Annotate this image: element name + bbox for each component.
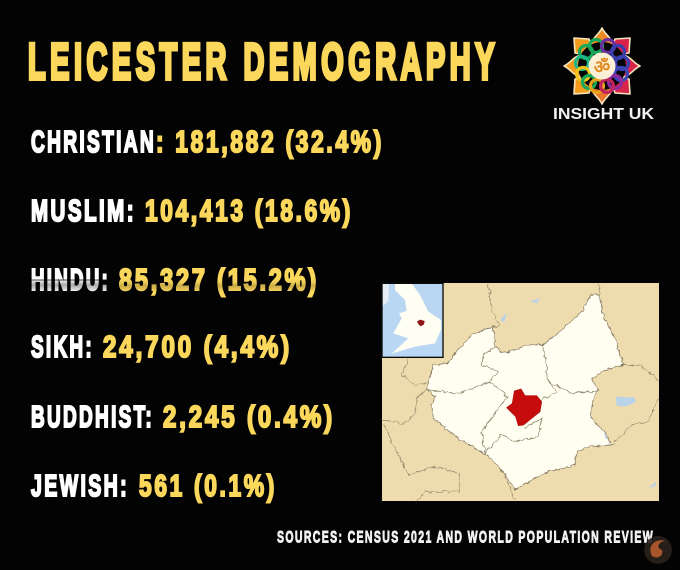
row: Buddhist [31, 399, 335, 434]
row: Sikh [31, 329, 292, 364]
row: Jewish: JEWISH: [31, 468, 129, 503]
row: Buddhist: BUDDHIST: [31, 399, 154, 434]
icon: mandala: ॐ [594, 57, 610, 77]
row: Jewish: 561 (0.1%) [139, 468, 277, 503]
row: Jewish [31, 468, 277, 503]
logo wordmark: INSIGHT UK [553, 106, 655, 123]
row: Sikh: SIKH: [31, 329, 94, 364]
district borders [427, 345, 598, 453]
Leicester city [507, 389, 542, 426]
water bodies [616, 397, 636, 407]
county outline [427, 293, 623, 490]
row: Muslim: 104,413 (18.6%) [145, 193, 353, 228]
row: Christian [31, 124, 384, 159]
row: Hindu: 85,327 (15.2%) [119, 262, 319, 297]
row: Christian: : 181,882 (32.4%) [156, 124, 384, 159]
inset map: England and Wales [382, 283, 443, 357]
watermark badge [644, 536, 672, 564]
row: Muslim [31, 193, 353, 228]
row: Hindu: HINDU: [31, 262, 110, 297]
row: Sikh: 24,700 (4,4%) [103, 329, 292, 364]
logo: Insight UK [553, 28, 655, 123]
row: Hindu [31, 262, 319, 297]
row: Buddhist: 2,245 (0.4%) [163, 399, 335, 434]
row: Muslim: MUSLIM: [31, 193, 136, 228]
neighbouring county borders [382, 283, 658, 501]
map of Leicestershire [382, 283, 659, 501]
row: Christian: CHRISTIAN [31, 124, 156, 159]
